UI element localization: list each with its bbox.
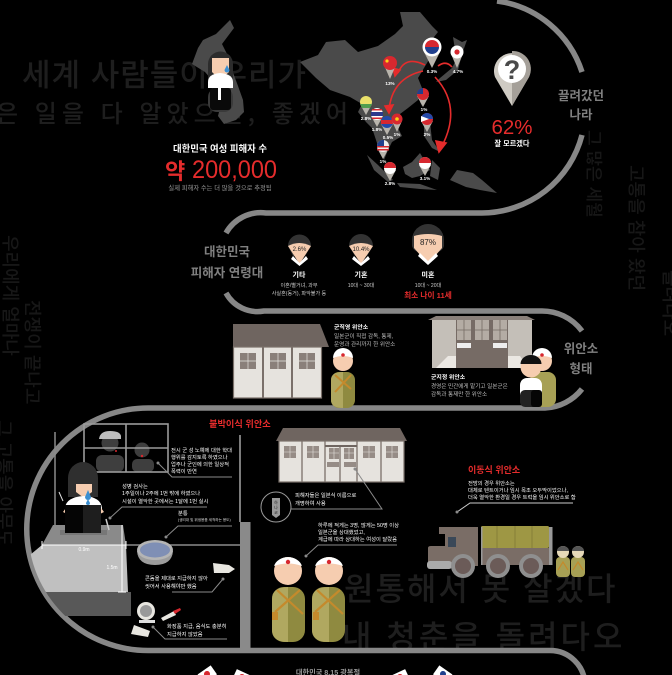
text: mobile type xyxy=(456,479,576,514)
headline: victim count: 약 xyxy=(165,159,185,184)
pin: Thailand xyxy=(371,108,383,132)
age group: married: 기혼 xyxy=(355,270,368,279)
pin: Vietnam xyxy=(392,114,402,137)
callout: health check: 시설이 열악한 곳에서는 1달에 1번 실시 xyxy=(122,497,208,505)
pin: Taiwan xyxy=(417,88,429,112)
age group: other: 사실혼(동거), 파악불가 등 xyxy=(272,290,327,297)
text: mobile type: 전방의 경우 위안소는 xyxy=(468,479,515,487)
callout: abuse: 폭력이 만연 xyxy=(171,467,197,475)
section heading: countries: 나라 xyxy=(569,108,593,122)
red arrows from Korea xyxy=(385,61,452,152)
text: military-run type: 운영과 관리까지 한 위안소 xyxy=(334,340,395,348)
callout: abuse: 행위를 감지토록 하였으나 xyxy=(171,453,228,461)
small flags xyxy=(198,665,452,675)
callout: health check xyxy=(108,482,208,520)
crying woman at bed xyxy=(59,462,109,535)
crying woman figure xyxy=(208,52,233,112)
unknown share pin xyxy=(494,51,531,106)
building: fixed comfort station xyxy=(276,428,407,482)
section heading: station types: 형태 xyxy=(569,361,593,376)
callout: condoms: 콘돔을 제대로 지급하지 않아 xyxy=(145,574,208,582)
Korea peninsula map xyxy=(192,20,244,124)
pin: China xyxy=(383,56,397,86)
pin: Malaysia xyxy=(377,140,389,164)
section heading: station types: 위안소 xyxy=(564,342,598,356)
heading: fixed comfort station: 붙박이식 위안소 xyxy=(209,418,271,429)
panel: fixed station room: 1.5m xyxy=(106,565,118,571)
text: designated type: 경영은 민간에게 맡기고 일본군은 xyxy=(431,382,508,390)
pin: South Korea xyxy=(422,38,442,74)
background handwriting: 그 많은 세월 xyxy=(583,130,608,218)
section heading: age groups xyxy=(191,244,263,280)
callout: condoms: 씻어서 사용해야만 했음 xyxy=(145,582,197,590)
callout: Japanese names: 코 xyxy=(274,510,278,515)
age group: married xyxy=(348,234,375,289)
pin: Philippines: 2% xyxy=(424,132,430,137)
callout: daily count xyxy=(304,521,399,558)
stat: 62% unknown: 잘 모르겠다 xyxy=(494,139,530,148)
headline: victim count: 실제 피해자 수는 더 많을 것으로 추정됨 xyxy=(168,183,272,192)
unknown share pin: ? xyxy=(504,55,520,85)
text: military-run type: 군직영 위안소 xyxy=(334,323,369,331)
callout: condoms xyxy=(145,574,224,592)
icons: cosmetics xyxy=(131,602,181,637)
small soldiers xyxy=(556,546,585,577)
soldier left xyxy=(272,557,305,642)
background handwriting: 원통해서 못 살겠다 xyxy=(344,564,617,610)
pin: Myanmar xyxy=(360,96,372,121)
pin: Cambodia: 0.5% xyxy=(383,135,393,140)
pin: Thailand: 1.8% xyxy=(372,127,382,132)
pin: Singapore: 2.8% xyxy=(385,181,395,186)
callout: Japanese names xyxy=(261,468,382,522)
callout: Japanese names: 피해자들은 일본식 이름으로 xyxy=(295,491,357,499)
pin: China: 13% xyxy=(385,81,395,86)
age group: other: 이혼/별거녀, 과부 xyxy=(280,282,318,289)
pin: Indonesia: 3.1% xyxy=(420,176,430,181)
pin: South Korea: 0.3% xyxy=(427,69,437,74)
pin: Japan: 4.7% xyxy=(453,69,463,74)
age group: other: 2.6% xyxy=(293,247,307,253)
soldier pair xyxy=(272,557,345,642)
building: military-designated comfort station xyxy=(428,316,535,368)
text: military-run type xyxy=(334,323,395,348)
pin: Japan xyxy=(450,46,464,74)
background handwriting: 은 일을 다 알았으면, 좋겠어 xyxy=(0,94,353,129)
soldier and civilian manager xyxy=(520,348,556,407)
text: mobile type: 대체로 텐트이거나 임시 목조 오두막이었으나, xyxy=(468,486,568,494)
age group: unmarried xyxy=(404,224,452,300)
callout: daily count: 일본군을 상대했었고, xyxy=(318,528,365,536)
soldier figure xyxy=(331,348,355,408)
age group: other: 기타 xyxy=(293,270,306,279)
section heading: age groups: 대한민국 xyxy=(204,244,250,259)
callout: Japanese names: 하 xyxy=(274,499,278,505)
callout: Japanese names: 나 xyxy=(274,504,278,510)
barred window with soldier silhouettes xyxy=(84,424,168,472)
callout: abuse: 업주나 군인에 의한 일상적 xyxy=(171,460,229,468)
truck xyxy=(427,526,552,578)
callout: daily count: 하루에 적게는 3명, 많게는 50명 이상 xyxy=(318,521,399,529)
pin: Philippines xyxy=(421,113,433,137)
background handwriting: 세계 사람들이 우리가 xyxy=(22,50,307,95)
pin: Cambodia xyxy=(381,116,393,140)
text: mobile type: 더욱 열악한 환경일 경우 트럭을 임시 위안소로 함 xyxy=(468,493,576,501)
text: designated type: 감독과 통제만 한 위안소 xyxy=(431,390,487,398)
pin: Indonesia xyxy=(419,157,431,181)
callout: abuse xyxy=(156,446,232,477)
callout: supplies: 지급하지 않았음 xyxy=(167,630,203,638)
background handwriting: 전쟁이 끝나고 xyxy=(20,300,46,404)
map pins with flags xyxy=(360,38,464,186)
background handwriting: 내 청춘을 돌려다오 xyxy=(342,612,625,658)
callout: daily count: 계급에 따라 상대하는 여성이 달랐음 xyxy=(318,535,397,543)
pin: Malaysia: 1% xyxy=(380,159,386,164)
headline: victim count: 대한민국 여성 피해자 수 xyxy=(173,143,267,154)
headline: victim count xyxy=(165,143,277,192)
callout: health check: 1주일이나 2주에 1번 밖에 하였으나 xyxy=(122,489,200,497)
callout: supplies: 화장품 지급, 음식도 충분히 xyxy=(167,622,227,630)
age group: other xyxy=(272,234,327,297)
callout: health check: 성병 검사는 xyxy=(122,482,148,490)
icon: basin xyxy=(137,540,173,565)
age group: married: 10.4% xyxy=(352,247,370,253)
Asia map xyxy=(300,12,497,193)
panel: fixed station room: 0.9m xyxy=(78,547,90,553)
section heading: age groups: 피해자 연령대 xyxy=(191,265,263,280)
icon: condom xyxy=(213,563,235,573)
text: designated type: 군지정 위안소 xyxy=(431,373,466,381)
pin: Taiwan: 1% xyxy=(421,107,427,112)
age group: unmarried: 최소 나이 11세 xyxy=(404,290,452,300)
callout: Japanese names: 개명하여 사용 xyxy=(295,499,326,507)
stat: 62% unknown: 62% xyxy=(491,116,533,139)
panel: fixed station room xyxy=(30,432,250,648)
text: designated type xyxy=(431,373,508,398)
soldier right xyxy=(312,557,345,642)
building: military-run comfort station xyxy=(233,324,329,398)
pin: Singapore xyxy=(384,162,396,186)
age group: unmarried: 10대 ~ 20대 xyxy=(415,282,442,289)
section heading: countries xyxy=(558,89,604,122)
callout: washing basin xyxy=(164,510,232,538)
age group: married: 10대 ~ 30대 xyxy=(348,282,375,289)
age group: unmarried: 87% xyxy=(420,238,436,247)
section heading: countries: 끌려갔던 xyxy=(558,89,604,103)
callout: washing basin: 분통 xyxy=(178,510,188,517)
callout: washing basin: (생리대 및 위생용품 세척하는 용도) xyxy=(178,517,231,522)
headline: victim count: 200,000 xyxy=(192,156,277,184)
section heading: station types xyxy=(564,342,598,376)
callout: supplies xyxy=(152,622,227,639)
background handwriting: 고통을 참아 왔던 xyxy=(624,165,650,291)
pin: Myanmar: 2.8% xyxy=(361,116,371,121)
pin: Vietnam: 1% xyxy=(394,132,400,137)
text: military-run type: 일본군이 직접 감독, 통제, xyxy=(334,332,394,340)
callout: abuse: 전시 군 성 노예에 대한 학대 xyxy=(171,446,232,454)
heading: mobile comfort station: 이동식 위안소 xyxy=(468,464,520,475)
age group: unmarried: 미혼 xyxy=(422,270,435,279)
